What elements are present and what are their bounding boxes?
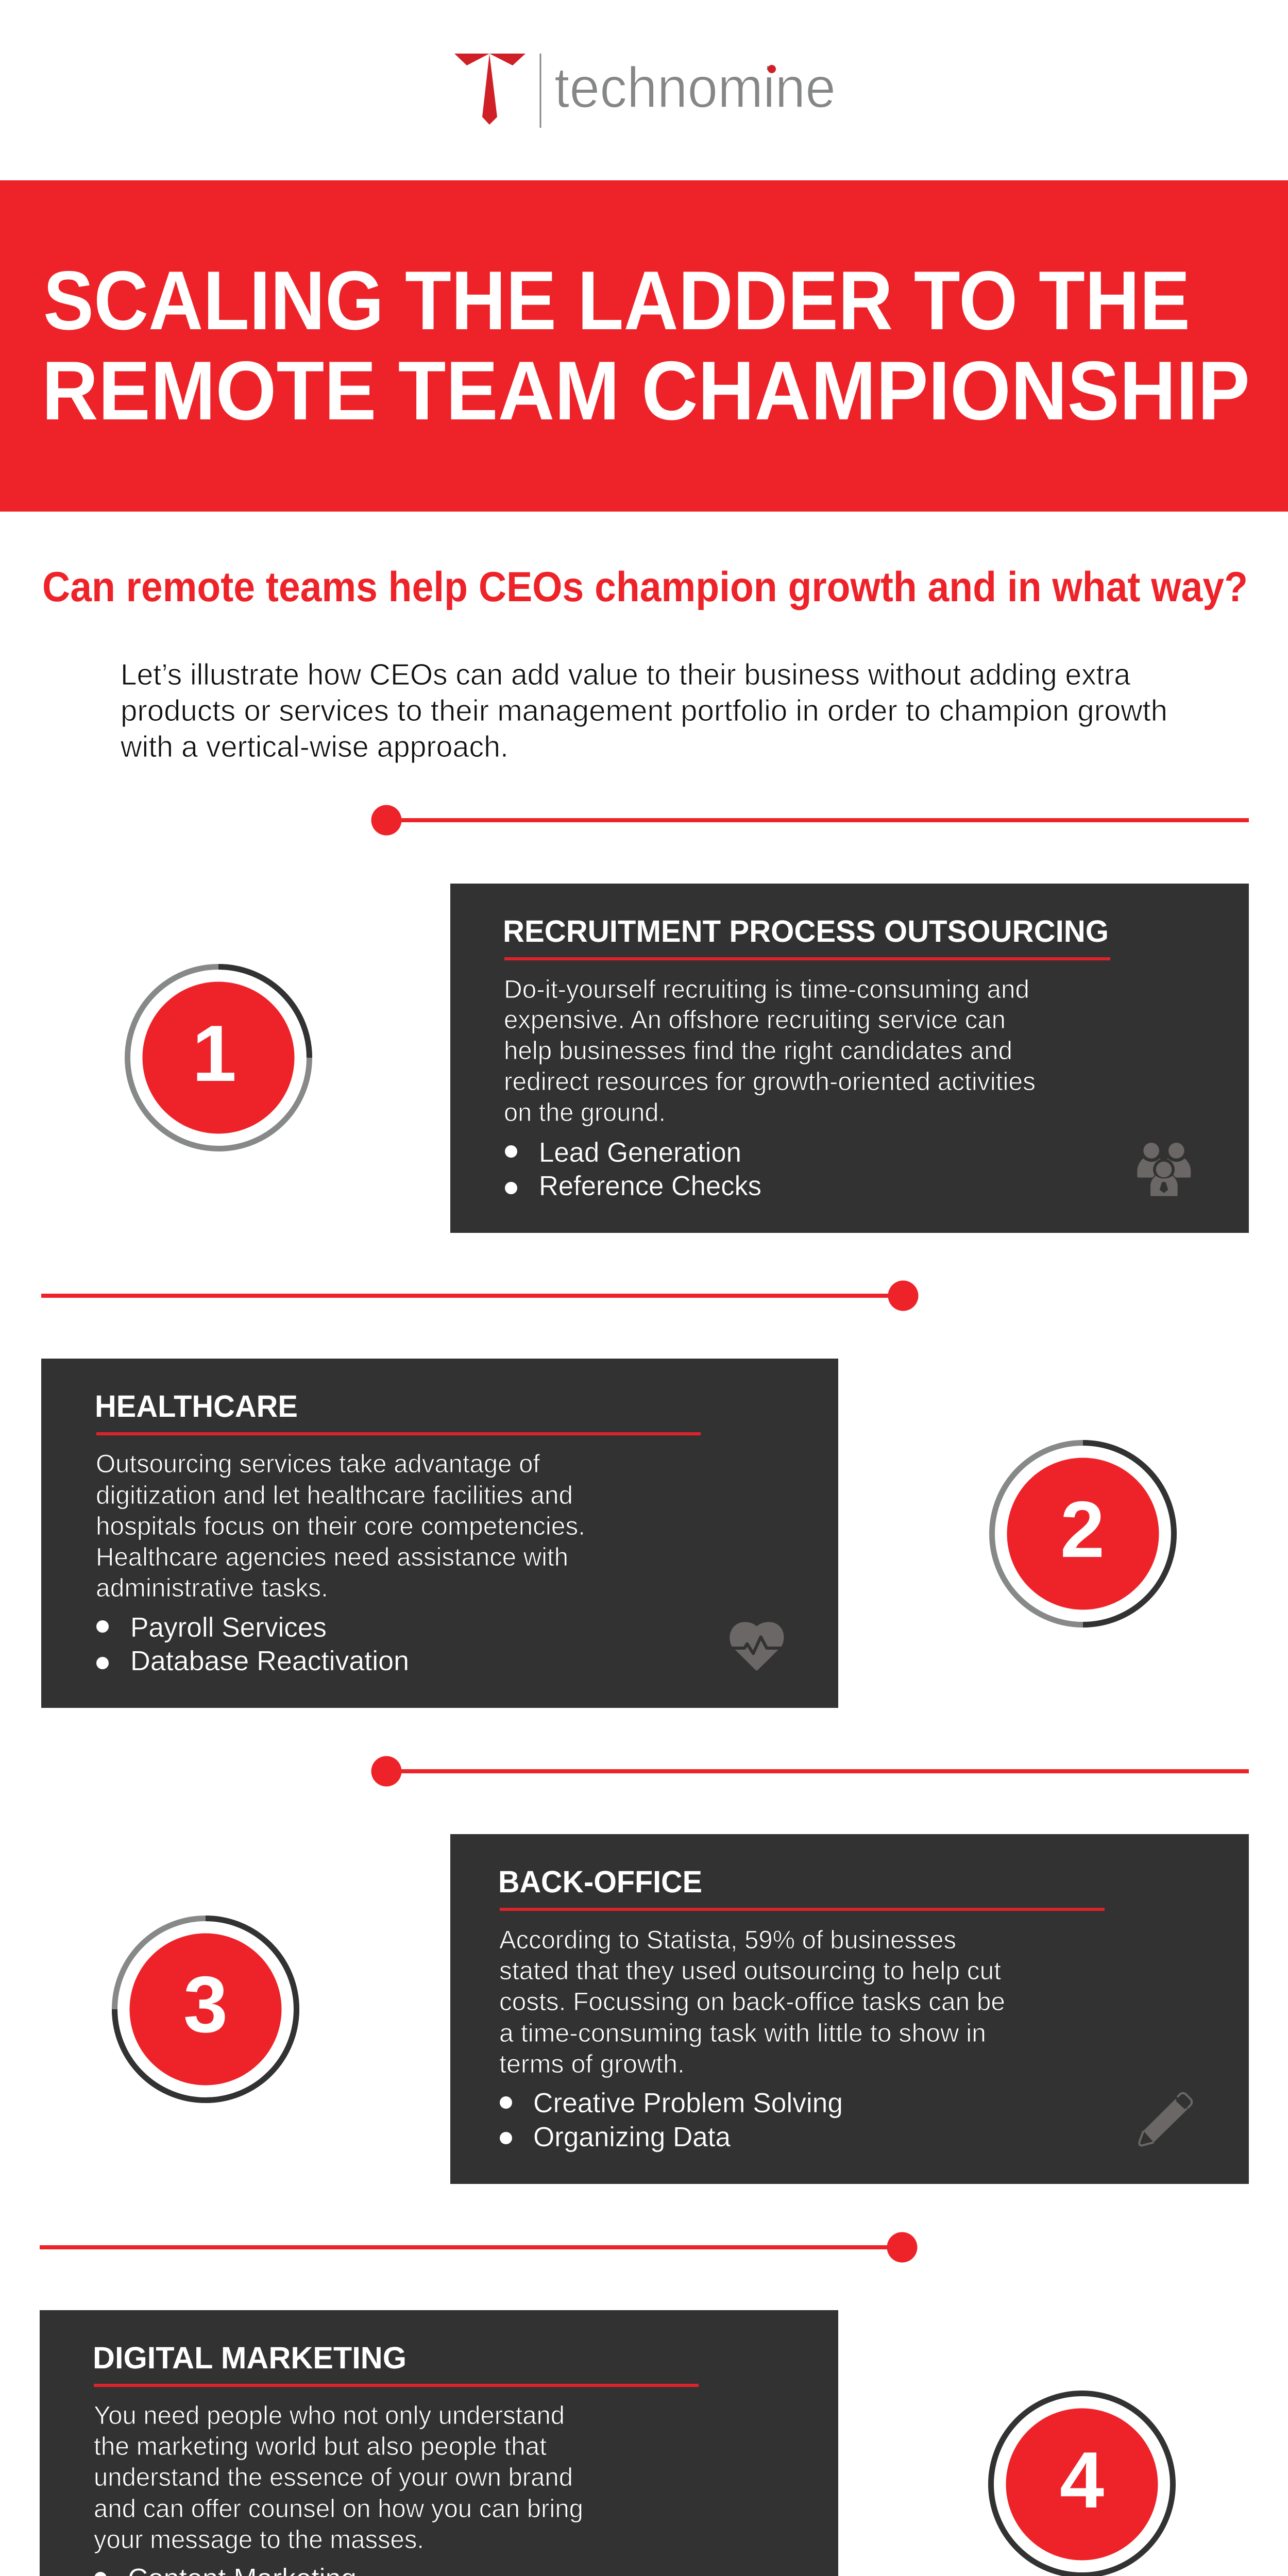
heading underline [96, 1432, 701, 1435]
bullet list [505, 1137, 761, 1201]
panel body text: Do-it-yourself recruiting is time-consuming and [504, 975, 1029, 1004]
panel body text: and can offer counsel on how you can bring [94, 2494, 583, 2523]
title [42, 254, 1250, 437]
step 2 number badge [992, 1443, 1174, 1625]
panel body text: terms of growth. [499, 2049, 685, 2078]
bullet list: Lead Generation [539, 1137, 741, 1168]
panel body text: on the ground. [504, 1098, 666, 1127]
intro paragraph: Let’s illustrate how CEOs can add value to their business without adding extra [121, 658, 1131, 691]
panel heading: RECRUITMENT PROCESS OUTSOURCING [503, 914, 1109, 948]
panel body text: You need people who not only understand [94, 2401, 565, 2430]
header banner [0, 180, 1288, 512]
panel body text: expensive. An offshore recruiting service can [504, 1005, 1006, 1034]
panel body text: help businesses find the right candidates and [504, 1036, 1012, 1065]
panel: back-office [450, 1834, 1249, 2184]
bullet list: Organizing Data [533, 2122, 731, 2153]
heading underline [94, 2384, 699, 2387]
connector 1 [371, 805, 1249, 836]
panel body text: Outsourcing services take advantage of [96, 1449, 540, 1478]
panel body text [499, 1925, 1005, 2078]
panel body text: the marketing world but also people that [94, 2432, 547, 2461]
panel body text: your message to the masses. [94, 2525, 424, 2554]
icon: red necktie T [454, 54, 526, 125]
logo divider [540, 54, 541, 128]
bullet list [96, 1612, 409, 1676]
panel heading: BACK-OFFICE [498, 1865, 702, 1899]
step 4 number badge: 4 [1060, 2435, 1104, 2524]
step 3 number badge: 3 [183, 1960, 228, 2049]
panel heading: DIGITAL MARKETING [93, 2341, 406, 2375]
heading underline [500, 1908, 1105, 1911]
heading underline [504, 957, 1110, 960]
panel body text: administrative tasks. [96, 1573, 328, 1602]
bullet list: Creative Problem Solving [533, 2088, 843, 2119]
bullet list: Database Reactivation [130, 1646, 409, 1676]
icon: pencil [1139, 2093, 1192, 2145]
panel body text: costs. Focussing on back-office tasks can be [499, 1987, 1005, 2016]
panel body text: redirect resources for growth-oriented activities [504, 1067, 1036, 1096]
logo: technomine [454, 54, 836, 128]
panel body text [504, 975, 1036, 1127]
step 1 number badge: 1 [192, 1009, 236, 1098]
panel: healthcare [41, 1359, 838, 1708]
title: SCALING THE LADDER TO THE [43, 254, 1190, 347]
panel body text: digitization and let healthcare facilities and [96, 1481, 573, 1510]
panel: recruitment process outsourcing [450, 884, 1249, 1233]
banner background [0, 180, 1288, 512]
panel body text: a time-consuming task with little to show in [499, 2019, 986, 2047]
panel body text: understand the essence of your own brand [94, 2463, 573, 2492]
intro paragraph [120, 658, 1167, 764]
connector 2 [41, 1281, 918, 1311]
step 3 number badge [114, 1919, 297, 2100]
panel body text [94, 2401, 583, 2554]
panel: digital marketing [40, 2310, 838, 2576]
step 4 number badge [991, 2394, 1173, 2575]
panel heading: HEALTHCARE [95, 1389, 298, 1423]
intro paragraph: with a vertical-wise approach. [120, 730, 509, 764]
connector 4 [40, 2232, 917, 2263]
step 2 number badge: 2 [1060, 1485, 1105, 1574]
panel body text: Healthcare agencies need assistance with [96, 1543, 568, 1571]
panel body text: According to Statista, 59% of businesses [499, 1925, 956, 1954]
panel body text: stated that they used outsourcing to help cut [499, 1956, 1001, 1985]
connector 3 [371, 1756, 1249, 1787]
intro paragraph: products or services to their management portfolio in order to champion growth [121, 694, 1167, 727]
logo wordmark: technomine [554, 56, 836, 120]
logo red dot on i [768, 65, 776, 73]
icon: team of people [1137, 1143, 1191, 1197]
panel body text: hospitals focus on their core competencies. [96, 1512, 585, 1540]
bullet list: Payroll Services [130, 1612, 327, 1643]
bullet list [500, 2088, 843, 2153]
icon: heart with pulse [730, 1622, 784, 1670]
panel body text [96, 1449, 585, 1602]
bullet list: Reference Checks [539, 1171, 761, 1201]
step 1 number badge [128, 967, 309, 1149]
